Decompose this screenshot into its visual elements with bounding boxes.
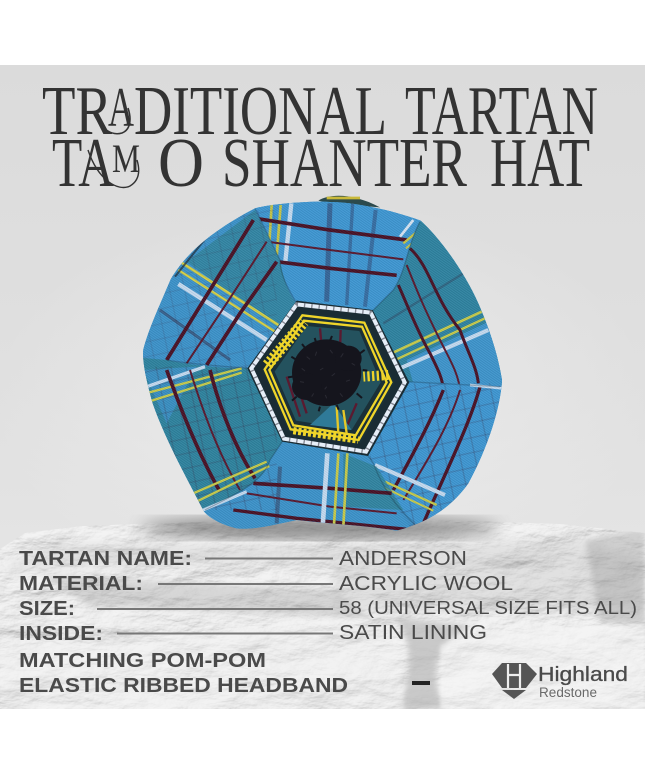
title: SHANTER [222, 125, 467, 202]
spec: tartan name [19, 547, 467, 570]
feature: matching pom-pom: MATCHING POM-POM [19, 649, 266, 672]
spec: inside [19, 621, 487, 645]
panel: right [373, 221, 502, 390]
panel: upper left [143, 208, 296, 366]
backdrop glow [0, 200, 645, 600]
spec: size: SIZE: [19, 597, 75, 620]
spec: inside: SATIN LINING [339, 621, 487, 644]
rock plinth [0, 515, 645, 710]
spec: size [19, 597, 637, 620]
spec: inside: INSIDE: [19, 622, 103, 645]
hat crown panels [143, 202, 502, 531]
spec: tartan name: ANDERSON [339, 547, 467, 570]
feature: elastic ribbed headband: ELASTIC RIBBED HEADBAND [19, 674, 348, 697]
spec: size: 58 (UNIVERSAL SIZE FITS ALL) [339, 597, 637, 618]
panel seams [167, 208, 500, 527]
panel: top [255, 202, 425, 310]
central hexagon band [247, 301, 409, 456]
twill texture [130, 190, 510, 535]
title: TA [52, 125, 114, 202]
title: TR [42, 73, 112, 150]
spec list [19, 547, 637, 697]
tartan hat [143, 196, 502, 531]
logo: Highland Redstone [492, 663, 628, 700]
title [42, 73, 598, 202]
title: M [112, 136, 140, 181]
spec: tartan name: TARTAN NAME: [19, 547, 192, 570]
panel: lower left [143, 358, 282, 512]
panel: bottom [204, 453, 410, 530]
pom-pom [288, 336, 367, 411]
title: HAT [490, 125, 590, 202]
spec: material [19, 572, 513, 595]
spec: material: MATERIAL: [19, 572, 143, 595]
title: DITIONAL [134, 73, 387, 150]
title: A [108, 77, 134, 139]
top sliver of hat [318, 196, 380, 207]
logo: Highland Redstone: Redstone [539, 685, 597, 700]
panel: lower right [368, 382, 502, 526]
hat shadow [140, 517, 500, 539]
logo: Highland Redstone: Highland [538, 664, 628, 686]
spec: material: ACRYLIC WOOL [339, 572, 513, 595]
title: O [158, 125, 204, 202]
